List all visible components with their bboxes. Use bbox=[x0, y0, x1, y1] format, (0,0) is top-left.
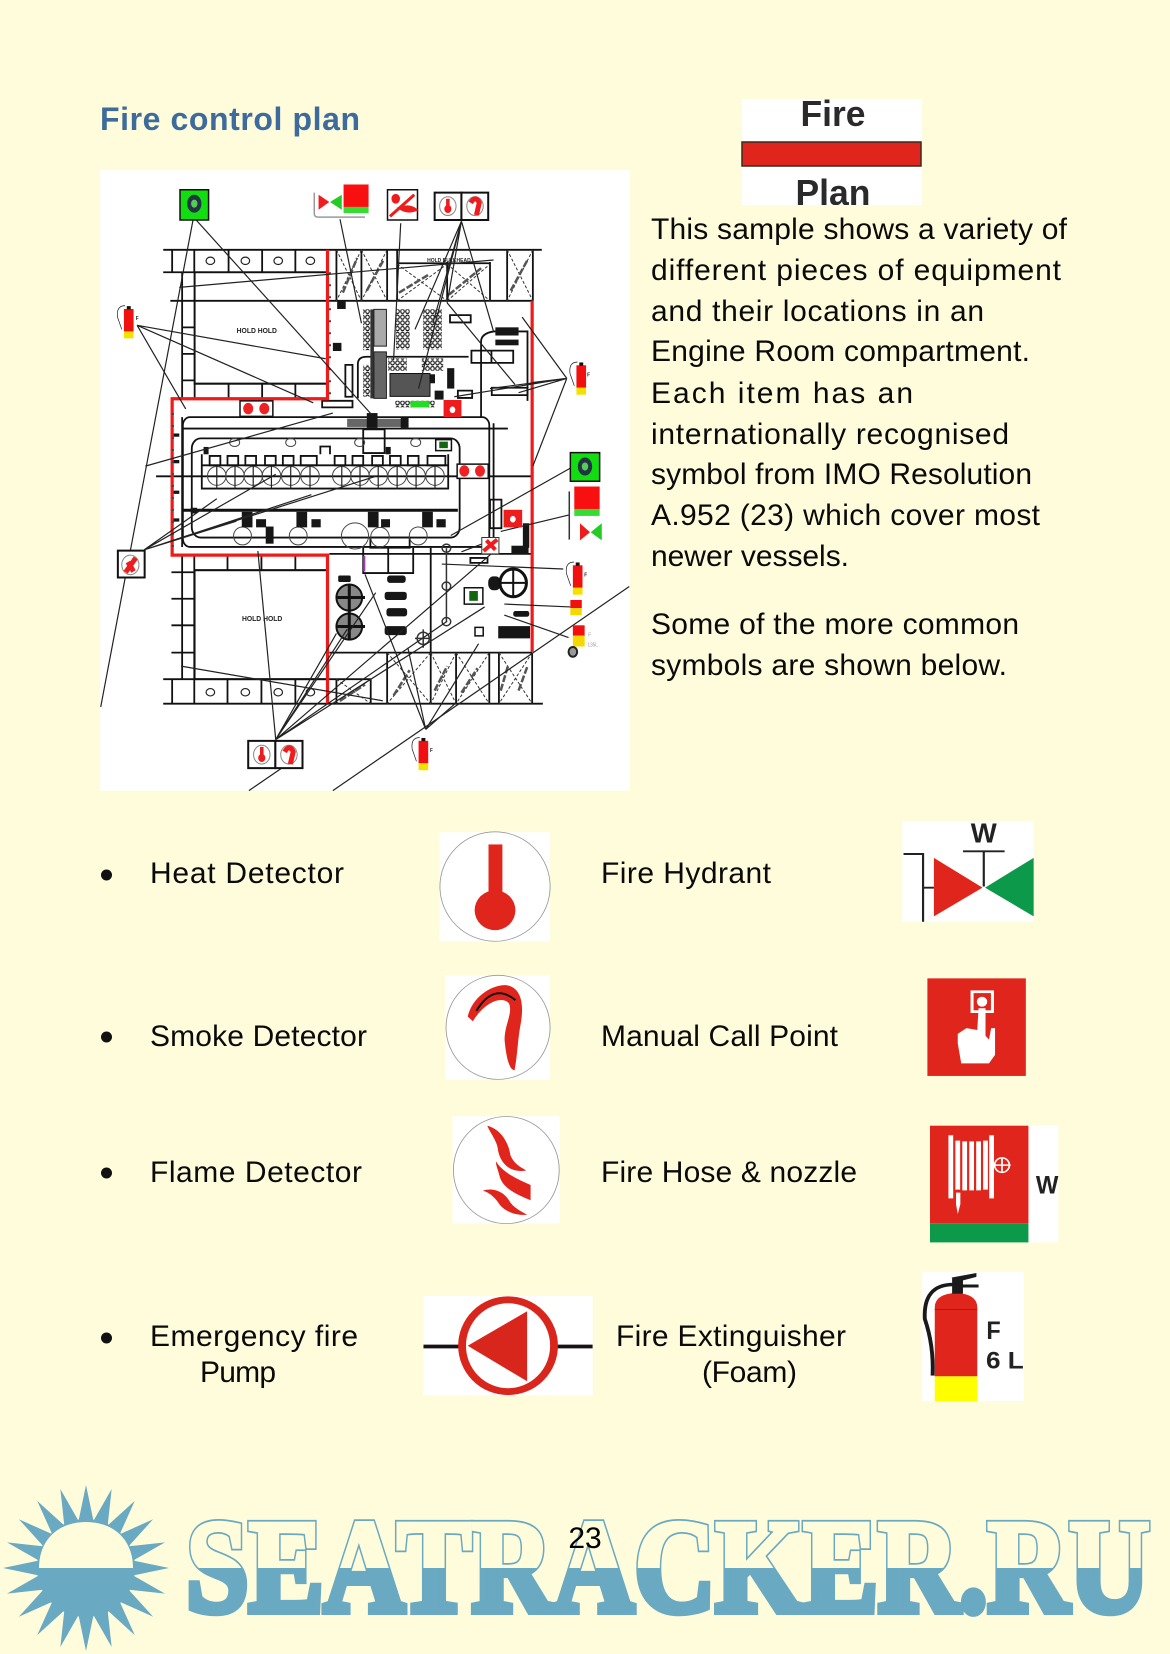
text block: description: newer vessels. bbox=[651, 540, 849, 573]
leader lines bbox=[101, 217, 629, 791]
legend labels: right column: Fire Hydrant bbox=[601, 857, 772, 890]
icon: extinguisher right lower: F bbox=[584, 572, 587, 578]
hull holes bbox=[206, 257, 315, 696]
panel: fire control plan drawing bbox=[100, 170, 630, 792]
icon: wheeled extinguisher: F bbox=[588, 632, 591, 639]
icon: heat detector bbox=[440, 832, 550, 941]
generator sets bbox=[363, 309, 443, 407]
icon: flame detector bbox=[453, 1116, 560, 1224]
text block: common symbols note: Some of the more common bbox=[651, 608, 1019, 641]
icon: detector pair bottom bbox=[248, 741, 302, 768]
legend labels: right column bbox=[601, 857, 857, 1389]
icon: extinguisher top right: F bbox=[587, 372, 590, 378]
sign: fire plan bbox=[741, 99, 922, 205]
text block: common symbols note: symbols are shown below. bbox=[651, 649, 1007, 682]
text block: description bbox=[651, 213, 1068, 573]
text block: description: A.952 (23) which cover most bbox=[651, 499, 1041, 532]
icon: flame detector left bbox=[118, 551, 145, 578]
icon: green breathing apparatus top bbox=[180, 190, 209, 220]
icon: smoke detector bbox=[445, 975, 550, 1080]
icon: wheeled extinguisher bbox=[569, 625, 598, 657]
legend labels: right column: Fire Extinguisher bbox=[616, 1320, 846, 1353]
legend labels: left column: Smoke Detector bbox=[150, 1020, 367, 1053]
icon: fire extinguisher bbox=[922, 1272, 1024, 1401]
text block: description: symbol from IMO Resolution bbox=[651, 458, 1032, 491]
icon: emergency fire pump bbox=[423, 1296, 593, 1395]
text block: description: This sample shows a variety of bbox=[651, 213, 1068, 246]
icon: inner detector pairs bbox=[240, 401, 488, 604]
text block: description: Each item has an bbox=[651, 377, 913, 410]
icon: fire extinguisher: F bbox=[986, 1316, 1001, 1344]
icon: manual call point bbox=[927, 978, 1026, 1076]
legend labels: left column: Flame Detector bbox=[150, 1156, 362, 1189]
main engine cylinders bbox=[208, 315, 528, 573]
text block: description: internationally recognised bbox=[651, 418, 1009, 451]
logo: sun emblem bbox=[3, 1485, 169, 1651]
logo: seatracker wordmark bbox=[188, 1519, 1151, 1617]
crossed tank cells bbox=[336, 250, 533, 704]
icon: no-smoking style sign bbox=[388, 190, 418, 220]
icon: extinguisher top left: F bbox=[136, 316, 139, 322]
legend labels: left column bbox=[150, 857, 367, 1389]
icon: fire hose and nozzle bbox=[930, 1126, 1059, 1242]
red fire boundary bbox=[172, 250, 532, 704]
hold labels: HOLD BULKHEAD bbox=[427, 258, 471, 264]
pump and round machines bbox=[336, 544, 528, 648]
sign: fire plan: Plan bbox=[796, 172, 870, 213]
icon: extinguisher bottom: F bbox=[430, 748, 433, 754]
legend labels: right column: Fire Hose & nozzle bbox=[601, 1156, 857, 1189]
title: Fire control plan bbox=[100, 101, 360, 137]
hold labels: HOLD HOLD bbox=[237, 326, 277, 335]
icon: extinguisher right lower bbox=[566, 562, 587, 595]
icon: fire hydrant: W bbox=[971, 818, 997, 849]
heavy engine base line bbox=[182, 509, 458, 512]
hold labels bbox=[237, 258, 471, 623]
icon: extinguisher bottom bbox=[412, 738, 433, 770]
icons: red alarm boxes bbox=[410, 400, 522, 554]
text block: common symbols note bbox=[651, 608, 1019, 682]
legend symbols bbox=[423, 818, 1059, 1402]
text block: description: Engine Room compartment. bbox=[651, 335, 1030, 368]
icon: fire hydrant bbox=[902, 818, 1034, 922]
icon: fire extinguisher: 6 L bbox=[986, 1348, 1024, 1374]
legend labels: left column: Emergency fire bbox=[150, 1320, 358, 1353]
sign: fire plan: Fire bbox=[800, 93, 866, 134]
icon: extinguisher top left bbox=[117, 306, 139, 338]
legend labels: right column: (Foam) bbox=[702, 1356, 797, 1389]
hold labels: HOLD HOLD bbox=[242, 614, 282, 623]
icon: hydrant and hose right bbox=[569, 487, 602, 540]
bullets bbox=[101, 870, 112, 1344]
icon: green breathing apparatus right bbox=[570, 453, 600, 481]
text block: description: and their locations in an bbox=[651, 295, 984, 328]
icon: small foam unit bbox=[570, 600, 582, 615]
icon: wheeled extinguisher: 135L bbox=[588, 642, 598, 649]
legend labels: right column: Manual Call Point bbox=[601, 1020, 839, 1053]
legend labels: left column: Pump bbox=[200, 1356, 276, 1389]
legend labels: left column: Heat Detector bbox=[150, 857, 344, 890]
icon: extinguisher top right bbox=[570, 362, 590, 395]
icon: hydrant and hose top bbox=[314, 184, 369, 217]
text block: description: different pieces of equipment bbox=[651, 254, 1062, 287]
page number: 23 bbox=[568, 1522, 602, 1555]
dark machinery blocks bbox=[173, 301, 530, 638]
icon: detector pair top bbox=[435, 193, 488, 220]
